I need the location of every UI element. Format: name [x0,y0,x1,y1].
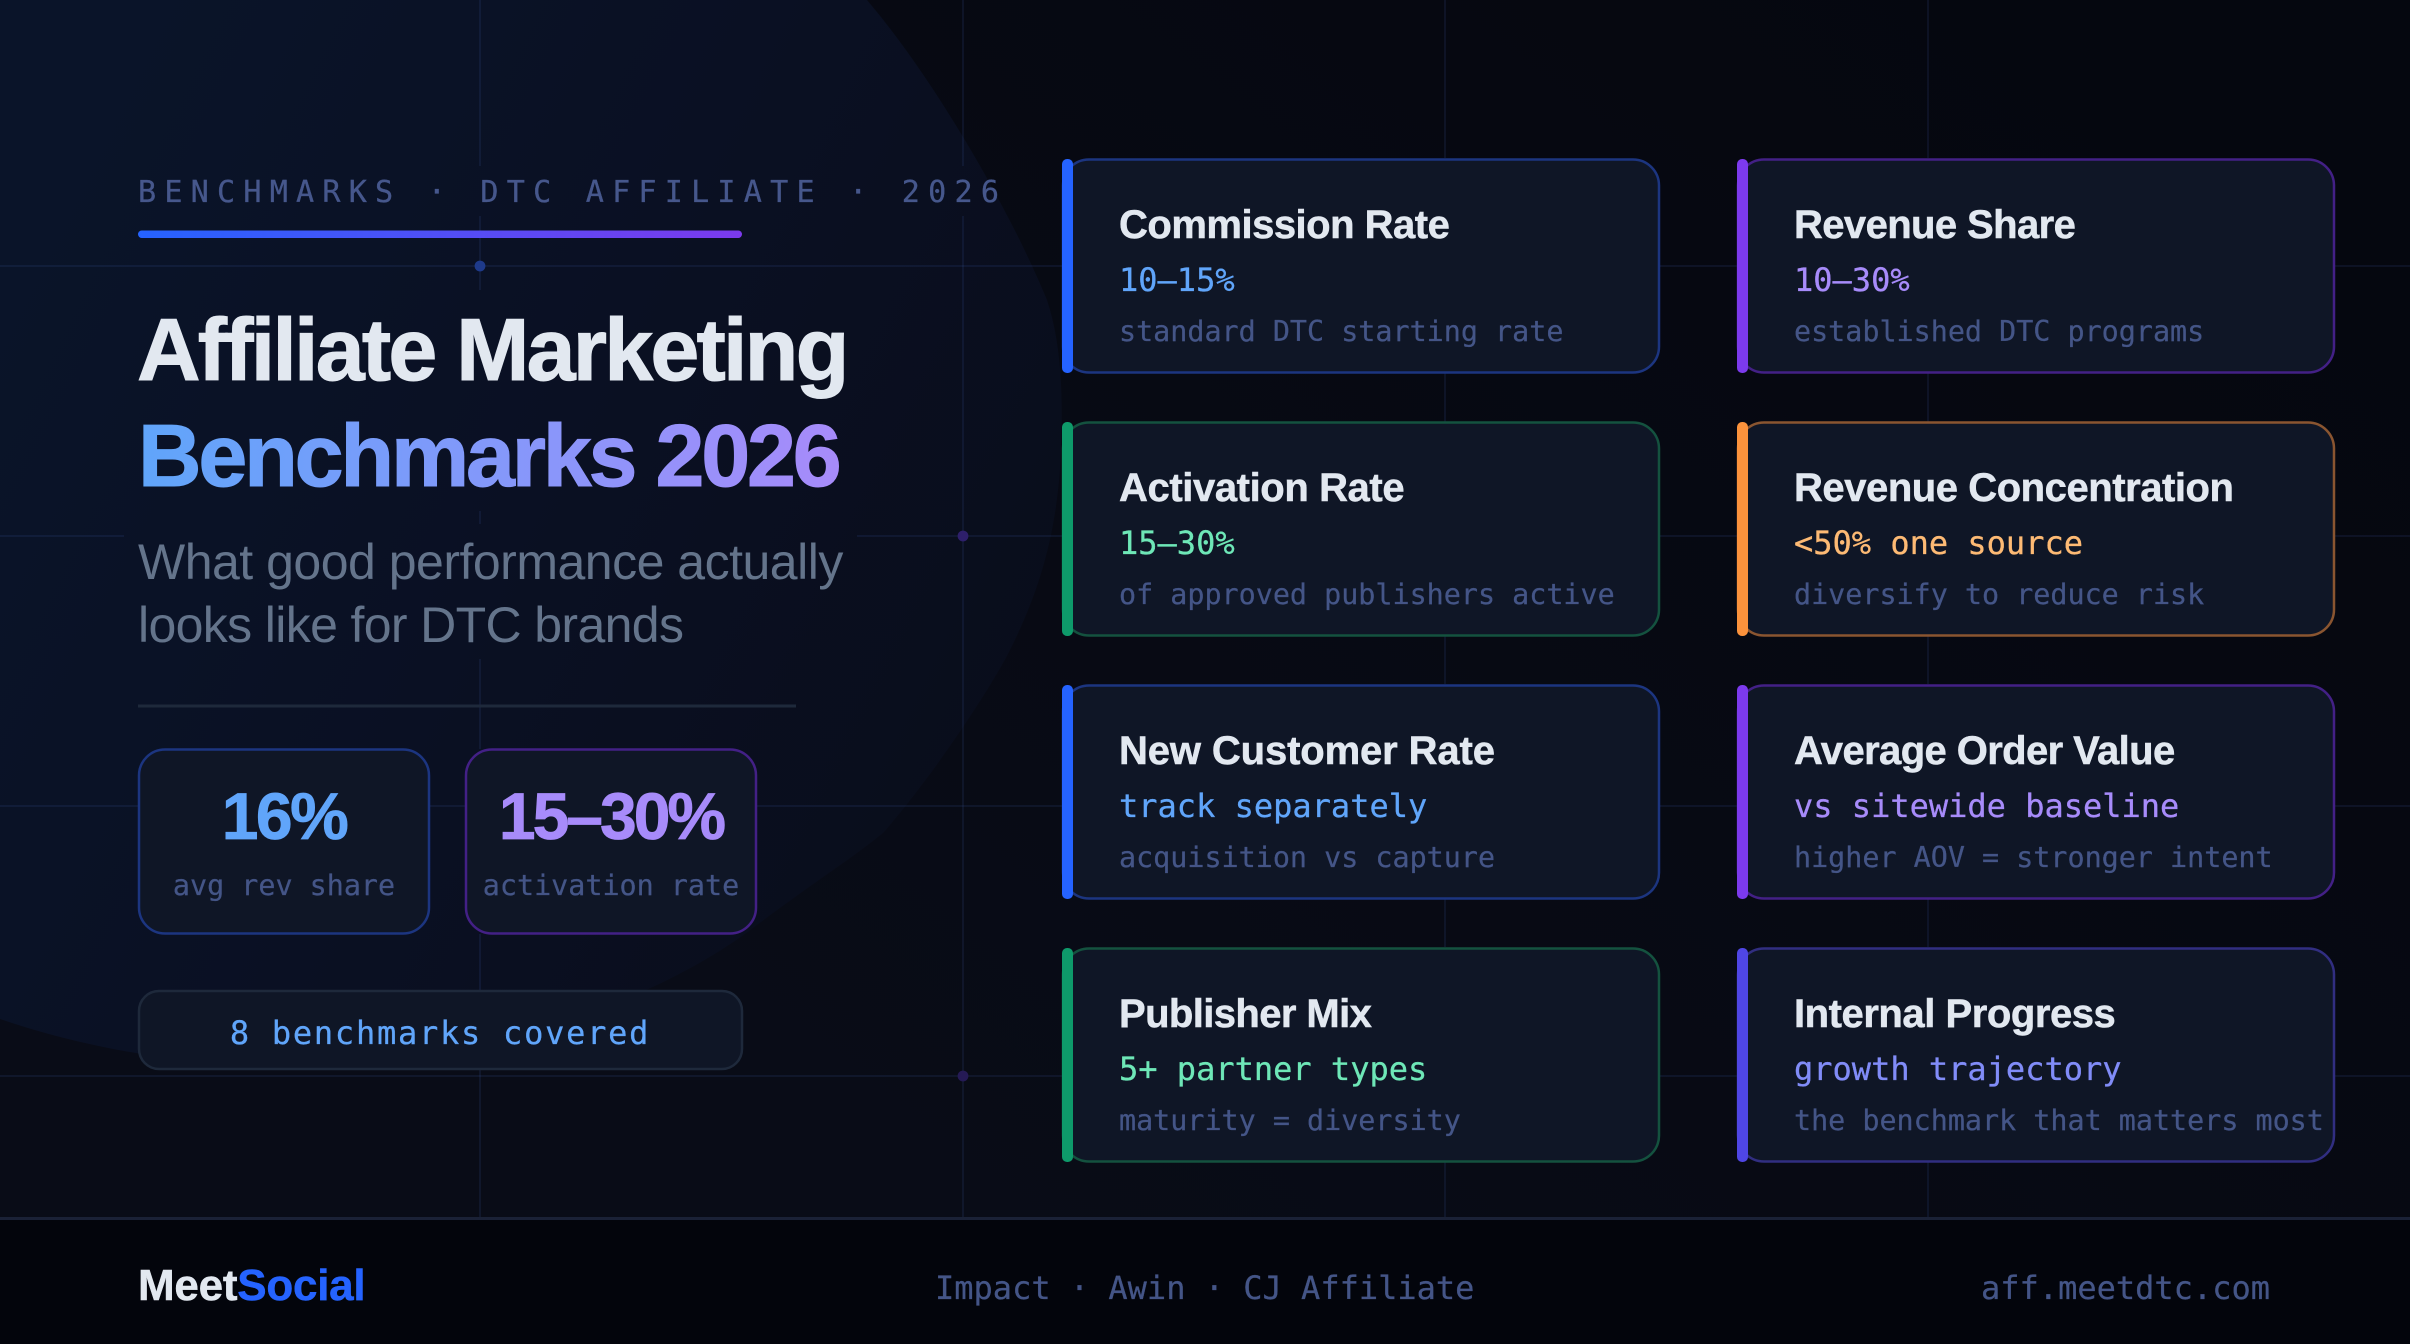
background blob [0,0,1062,1065]
stat: avg rev share [139,750,429,934]
grid node: dim purple [958,1071,968,1081]
stat: activation rate: activation rate [483,869,739,902]
card: Revenue Share: 10–30% [1794,261,1910,299]
card: Internal Progress: the benchmark that matters most [1794,1104,2324,1137]
title: Benchmarks 2026 [138,406,839,505]
card: Average Order Value: vs sitewide baseline [1794,787,2179,825]
card: Commission Rate: standard DTC starting rate [1119,315,1563,348]
card: Commission Rate: 10–15% [1119,261,1235,299]
card: Internal Progress [1737,948,2334,1162]
card: Internal Progress: Internal Progress [1794,992,2115,1036]
card: New Customer Rate: New Customer Rate [1119,729,1495,773]
card: Revenue Share: established DTC programs [1794,315,2204,348]
card: Publisher Mix: 5+ partner types [1119,1050,1427,1088]
stat: avg rev share: avg rev share [173,869,395,902]
title [137,300,847,505]
card: Publisher Mix: maturity = diversity [1119,1104,1461,1137]
footer url: aff.meetdtc.com [1981,1269,2270,1307]
grid node: purple [958,531,968,541]
accent bar [138,230,742,238]
card: Revenue Share [1737,159,2334,373]
card: Activation Rate: 15–30% [1119,524,1235,562]
card: Revenue Concentration: <50% one source [1794,524,2083,562]
card: New Customer Rate: track separately [1119,787,1427,825]
stat: activation rate: 15–30% [499,779,724,853]
card: Revenue Concentration: Revenue Concentration [1794,466,2234,510]
card: Average Order Value: Average Order Value [1794,729,2175,773]
subtitle: looks like for DTC brands [138,597,683,653]
pill: benchmarks covered: 8 benchmarks covered [230,1014,650,1052]
card: Activation Rate: Activation Rate [1119,466,1404,510]
card: Revenue Concentration [1737,422,2334,636]
footer logo: MeetSocial [138,1261,365,1310]
card: Internal Progress: growth trajectory [1794,1050,2122,1088]
card: Revenue Share: Revenue Share [1794,203,2075,247]
card: Average Order Value [1737,685,2334,899]
pill: benchmarks covered [139,991,742,1069]
eyebrow: BENCHMARKS · DTC AFFILIATE · 2026 [138,175,1007,210]
card: New Customer Rate [1062,685,1659,899]
card: Average Order Value: higher AOV = stronger intent [1794,841,2273,874]
card: Commission Rate [1062,159,1659,373]
subtitle: What good performance actually [138,534,843,590]
card: New Customer Rate: acquisition vs capture [1119,841,1495,874]
grid node: blue [475,261,485,271]
stat: activation rate [466,750,756,934]
title: Affiliate Marketing [137,300,847,399]
card: Commission Rate: Commission Rate [1119,203,1449,247]
subtitle [138,534,843,653]
stat: avg rev share: 16% [222,779,347,853]
card: Revenue Concentration: diversify to reduce risk [1794,578,2204,611]
card: Publisher Mix: Publisher Mix [1119,992,1372,1036]
footer [0,1217,2410,1344]
footer partners: Impact · Awin · CJ Affiliate [935,1269,1474,1307]
card: Activation Rate [1062,422,1659,636]
card: Publisher Mix [1062,948,1659,1162]
card: Activation Rate: of approved publishers active [1119,578,1615,611]
